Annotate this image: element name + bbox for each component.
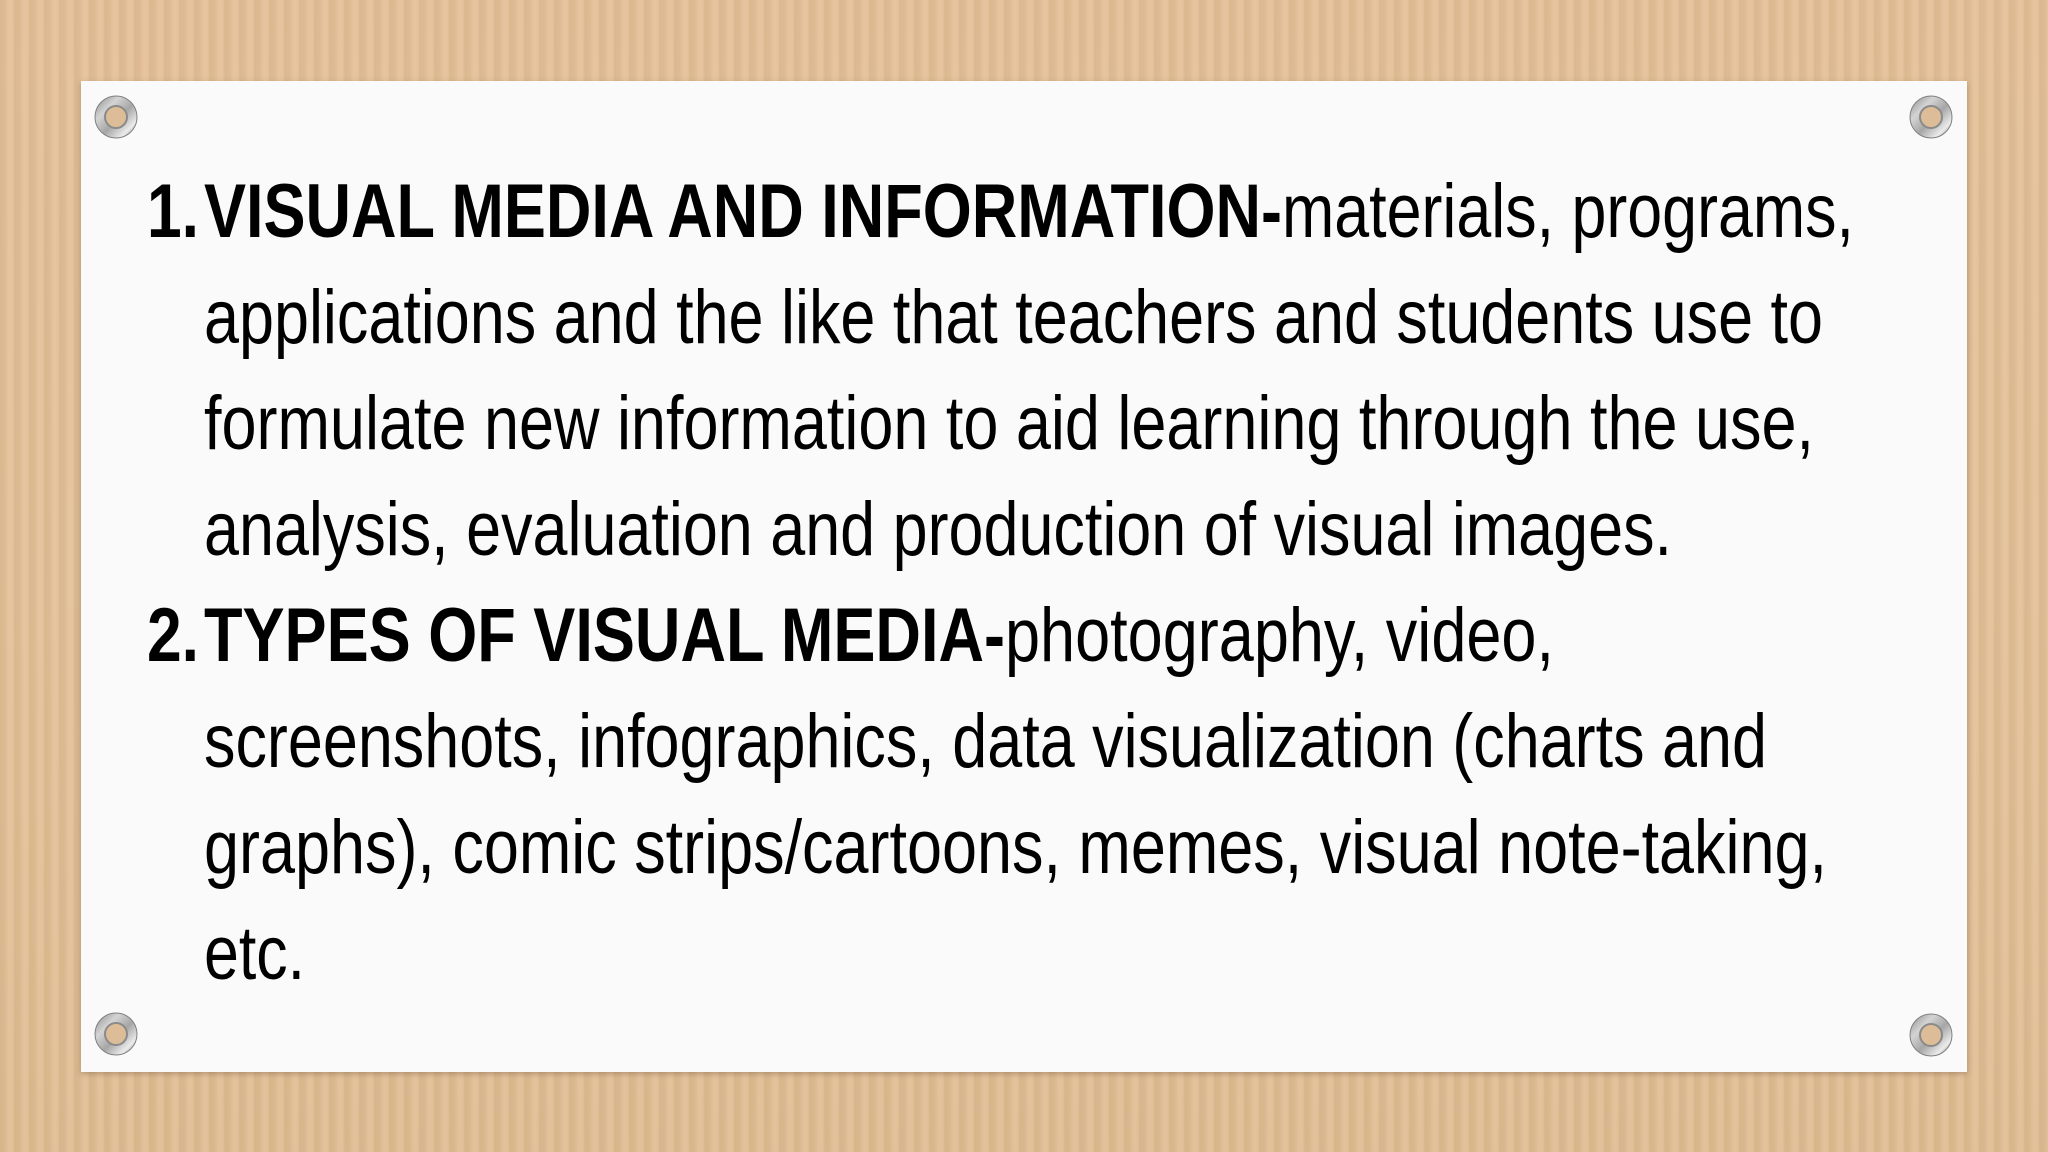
text block: item 1 visual media and information — [147, 169, 1854, 572]
text block: item 1 visual media and information: materials, programs, — [1282, 169, 1854, 254]
icon: grommet bottom right — [1910, 1014, 1952, 1056]
text block: item 2 types of visual media: TYPES OF VISUAL MEDIA- — [204, 593, 1005, 678]
icon: grommet top left — [95, 96, 137, 138]
icon: grommet bottom left — [95, 1013, 137, 1055]
icon: grommet top right — [1910, 96, 1952, 138]
text block: item 2 types of visual media: etc. — [204, 911, 305, 996]
text block: item 2 types of visual media: 2. — [147, 593, 199, 678]
text block: item 1 visual media and information: analysis, evaluation and production of visual images. — [204, 487, 1672, 572]
text block: item 2 types of visual media — [147, 593, 1827, 996]
text block: item 1 visual media and information: VISUAL MEDIA AND INFORMATION- — [204, 169, 1282, 254]
text block: item 2 types of visual media: photography, video, — [1005, 593, 1554, 678]
text block: item 1 visual media and information: 1. — [147, 169, 199, 254]
text block: item 2 types of visual media: screenshots, infographics, data visualization (charts and — [204, 699, 1767, 784]
panel: white paper sheet — [81, 81, 1967, 1072]
